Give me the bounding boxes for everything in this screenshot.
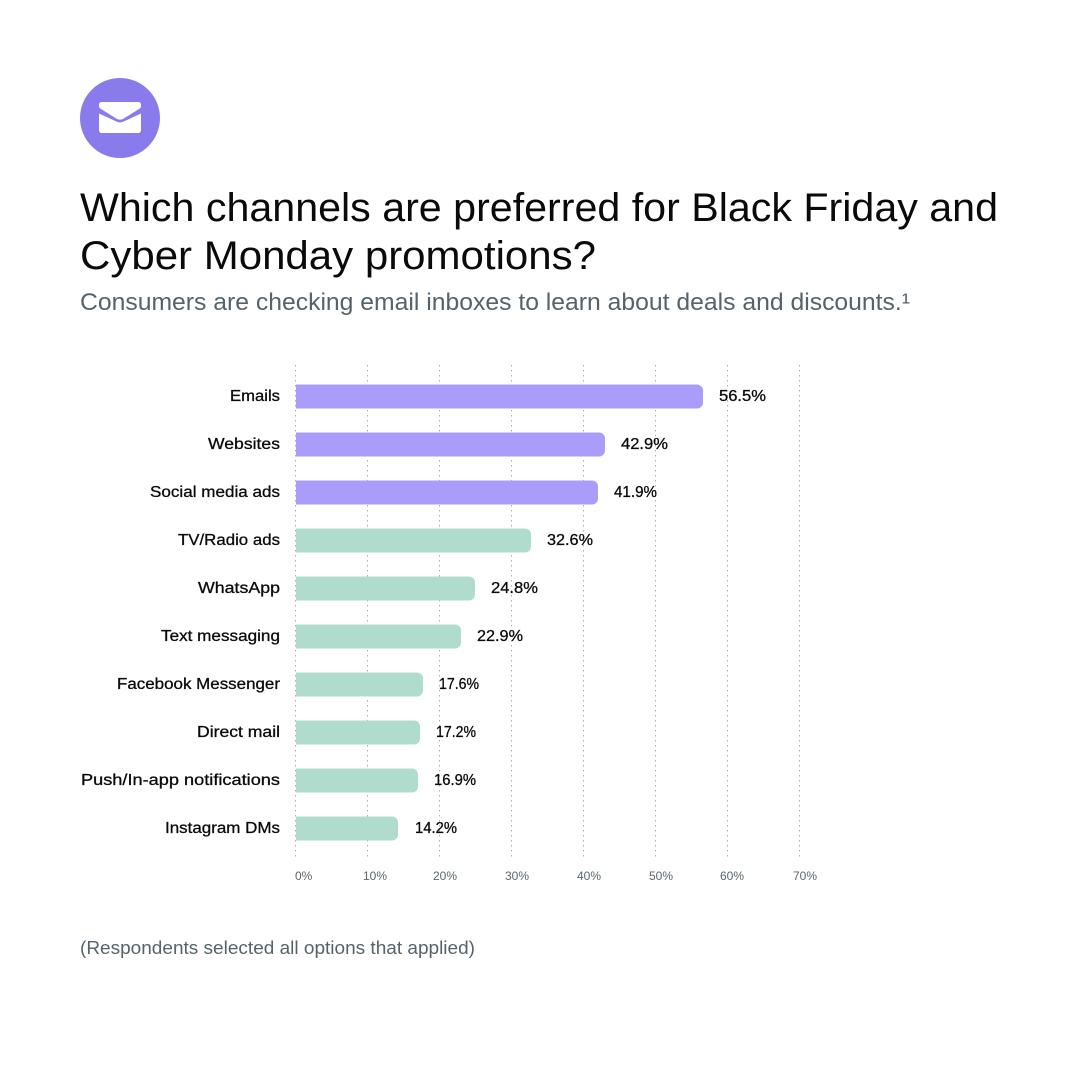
row: Instagram DMs: Instagram DMs — [165, 820, 280, 837]
x axis labels: 10% — [363, 869, 387, 883]
bar chart: preferred channels — [81, 365, 817, 883]
row: TV/Radio ads — [178, 528, 593, 552]
footnote: (Respondents selected all options that applied) — [80, 938, 475, 958]
row: Websites — [208, 432, 668, 456]
row: Facebook Messenger: Facebook Messenger — [117, 676, 280, 693]
row: Push/In-app notifications: Push/In-app notifications — [81, 772, 280, 789]
row: TV/Radio ads: 32.6% — [547, 532, 593, 549]
x axis labels: 50% — [649, 869, 673, 883]
row: Websites: Websites — [208, 436, 280, 453]
row: Text messaging — [161, 624, 523, 648]
row: Push/In-app notifications — [81, 768, 476, 792]
x axis labels — [295, 869, 817, 883]
row: Emails: 56.5% — [719, 388, 766, 405]
title — [80, 186, 998, 278]
row: Direct mail: 17.2% — [436, 724, 476, 741]
row: Direct mail: Direct mail — [197, 724, 280, 741]
title: Which channels are preferred for Black Friday and — [80, 186, 998, 230]
icon: email envelope badge — [80, 78, 160, 158]
row: Social media ads: Social media ads — [150, 484, 280, 501]
x axis labels: 60% — [720, 869, 744, 883]
row: Websites: 42.9% — [621, 436, 668, 453]
row: WhatsApp: 24.8% — [491, 580, 538, 597]
row: TV/Radio ads: TV/Radio ads — [178, 532, 280, 549]
row: Instagram DMs — [165, 816, 457, 840]
row: Text messaging: 22.9% — [477, 628, 523, 645]
row: Push/In-app notifications: 16.9% — [434, 772, 476, 789]
row: Facebook Messenger: 17.6% — [439, 676, 479, 693]
row: WhatsApp — [198, 576, 538, 600]
subtitle: Consumers are checking email inboxes to learn about deals and discounts.¹ — [80, 289, 910, 316]
row: Social media ads — [150, 480, 657, 504]
row: Instagram DMs: 14.2% — [415, 820, 457, 837]
row: Emails — [230, 384, 766, 408]
row: Social media ads: 41.9% — [614, 484, 657, 501]
row: Text messaging: Text messaging — [161, 628, 280, 645]
x axis labels: 70% — [793, 869, 817, 883]
row: WhatsApp: WhatsApp — [198, 580, 280, 597]
title: Cyber Monday promotions? — [80, 234, 596, 278]
row: Facebook Messenger — [117, 672, 479, 696]
row: Direct mail — [197, 720, 476, 744]
x axis labels: 20% — [433, 869, 457, 883]
x axis labels: 40% — [577, 869, 601, 883]
row: Emails: Emails — [230, 388, 280, 405]
x axis labels: 30% — [505, 869, 529, 883]
x axis labels: 0% — [295, 869, 313, 883]
